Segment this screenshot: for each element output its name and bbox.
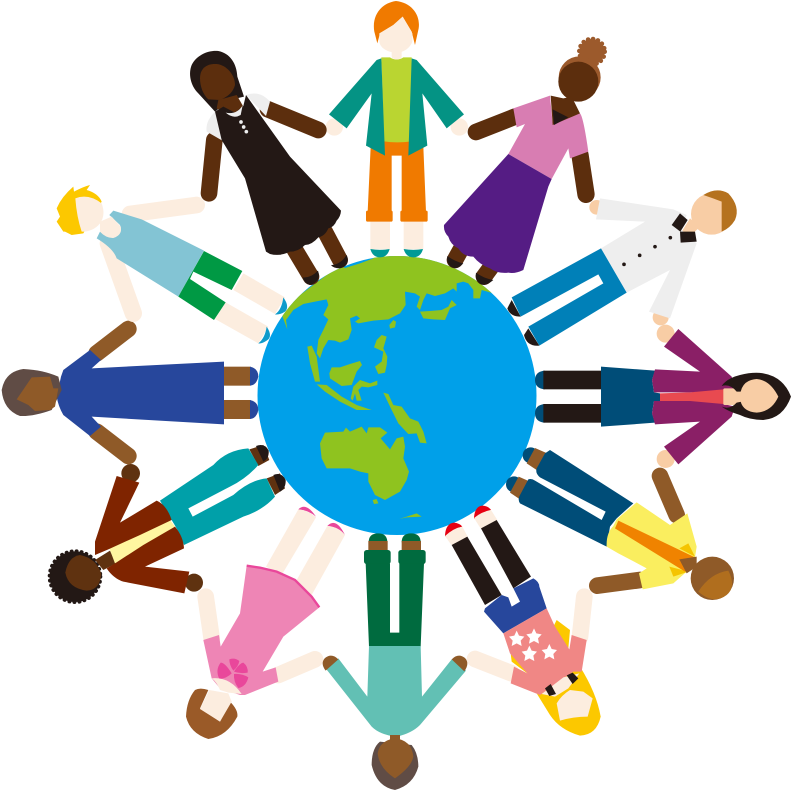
person: yellow shirt and navy trousers [506,447,734,600]
neck [217,95,243,113]
jacket [95,476,189,593]
legs [452,520,531,605]
hair [703,190,737,232]
face [378,738,413,778]
neck [390,735,400,740]
hands [323,656,467,671]
neck [679,557,697,573]
arms and legs [209,109,340,277]
shirt [607,502,697,589]
shoes [303,255,348,285]
straps [545,673,578,696]
person: pink dress [186,507,345,739]
shorts [178,251,242,320]
stars [509,628,557,661]
trousers [512,248,627,346]
arms [206,597,315,675]
hair [698,571,732,599]
buttons [622,236,672,266]
neck [95,551,116,570]
hands [657,325,675,468]
hair [190,51,244,112]
shorts [484,578,547,633]
hair [537,667,601,736]
face [17,377,58,411]
hair [186,689,237,739]
shirt [97,211,204,297]
person: white shirt and blue trousers [507,190,737,346]
bow [217,659,248,688]
face [741,379,778,413]
arms [597,476,677,586]
trousers [366,140,428,222]
face [558,62,598,102]
hair [559,56,601,98]
jacket [329,58,464,156]
shoes [258,297,287,343]
top [503,608,587,695]
trousers [160,448,275,545]
blouse [660,387,725,405]
socks [445,506,491,537]
shoes [447,256,493,285]
neck [723,388,743,405]
face [200,690,232,722]
skirt [444,154,552,273]
hair [372,742,418,790]
person: teal trousers and red-brown jacket [50,445,286,602]
shirt [381,57,412,142]
person: blond boy, light blue shirt and green shorts [57,185,287,343]
neckline [553,109,568,125]
shoes [535,371,545,423]
shoes [369,533,421,542]
jacket [652,329,735,464]
face [75,197,103,232]
neck [542,673,579,697]
neck [212,678,242,694]
shoes [506,447,539,492]
hair strands [511,620,570,673]
person: purple jacket and navy skirt [535,325,791,468]
legs [543,371,602,423]
trousers [519,450,633,547]
arms [475,597,584,673]
hair [374,1,419,45]
hair [722,373,791,420]
person: purple skirt [444,39,605,285]
buttons [239,120,248,133]
dress [57,350,224,436]
globe [258,250,536,535]
collar [669,543,695,577]
person: star shirt and blond hair [445,506,601,736]
collar [672,213,697,243]
dress trim [247,566,319,607]
shirt [508,96,588,179]
hair [50,551,100,602]
neck [100,217,121,238]
face [691,193,732,235]
neck [551,96,580,125]
shoes [370,249,423,257]
person: blue dress [2,329,258,456]
hands [589,200,669,325]
shoes [250,367,258,419]
shirt [596,198,697,318]
legs [370,220,423,249]
person: bottom, teal shirt and green trousers [323,533,467,790]
skirt [601,367,660,427]
face [557,690,593,721]
dress [215,95,341,255]
face [200,64,235,100]
head [691,557,734,600]
hair [2,369,62,416]
neck [392,50,402,59]
sleeves [206,93,270,141]
hair bun [579,39,605,64]
shins [368,541,421,552]
arms [108,205,197,313]
hands [326,118,468,136]
dress [203,566,319,695]
legs [223,367,251,419]
ocean [258,256,536,535]
shins [249,445,285,495]
person: black dress [190,51,348,285]
legs [215,273,285,343]
legs [266,509,345,595]
tie [615,521,695,572]
neck [682,218,700,233]
arms [97,329,128,456]
hair [57,185,102,235]
hands [121,464,203,592]
feet [445,510,497,545]
shirt [326,646,466,737]
face [65,555,101,591]
shins [510,448,547,499]
shoes [256,445,286,492]
arms and legs [455,117,586,277]
shoes [507,300,539,346]
collar [226,105,243,117]
socks [298,507,345,535]
shirt [109,520,175,563]
continents [280,250,500,519]
trousers [364,550,426,647]
face [379,17,412,53]
person: top, orange trousers and teal jacket [326,1,468,257]
